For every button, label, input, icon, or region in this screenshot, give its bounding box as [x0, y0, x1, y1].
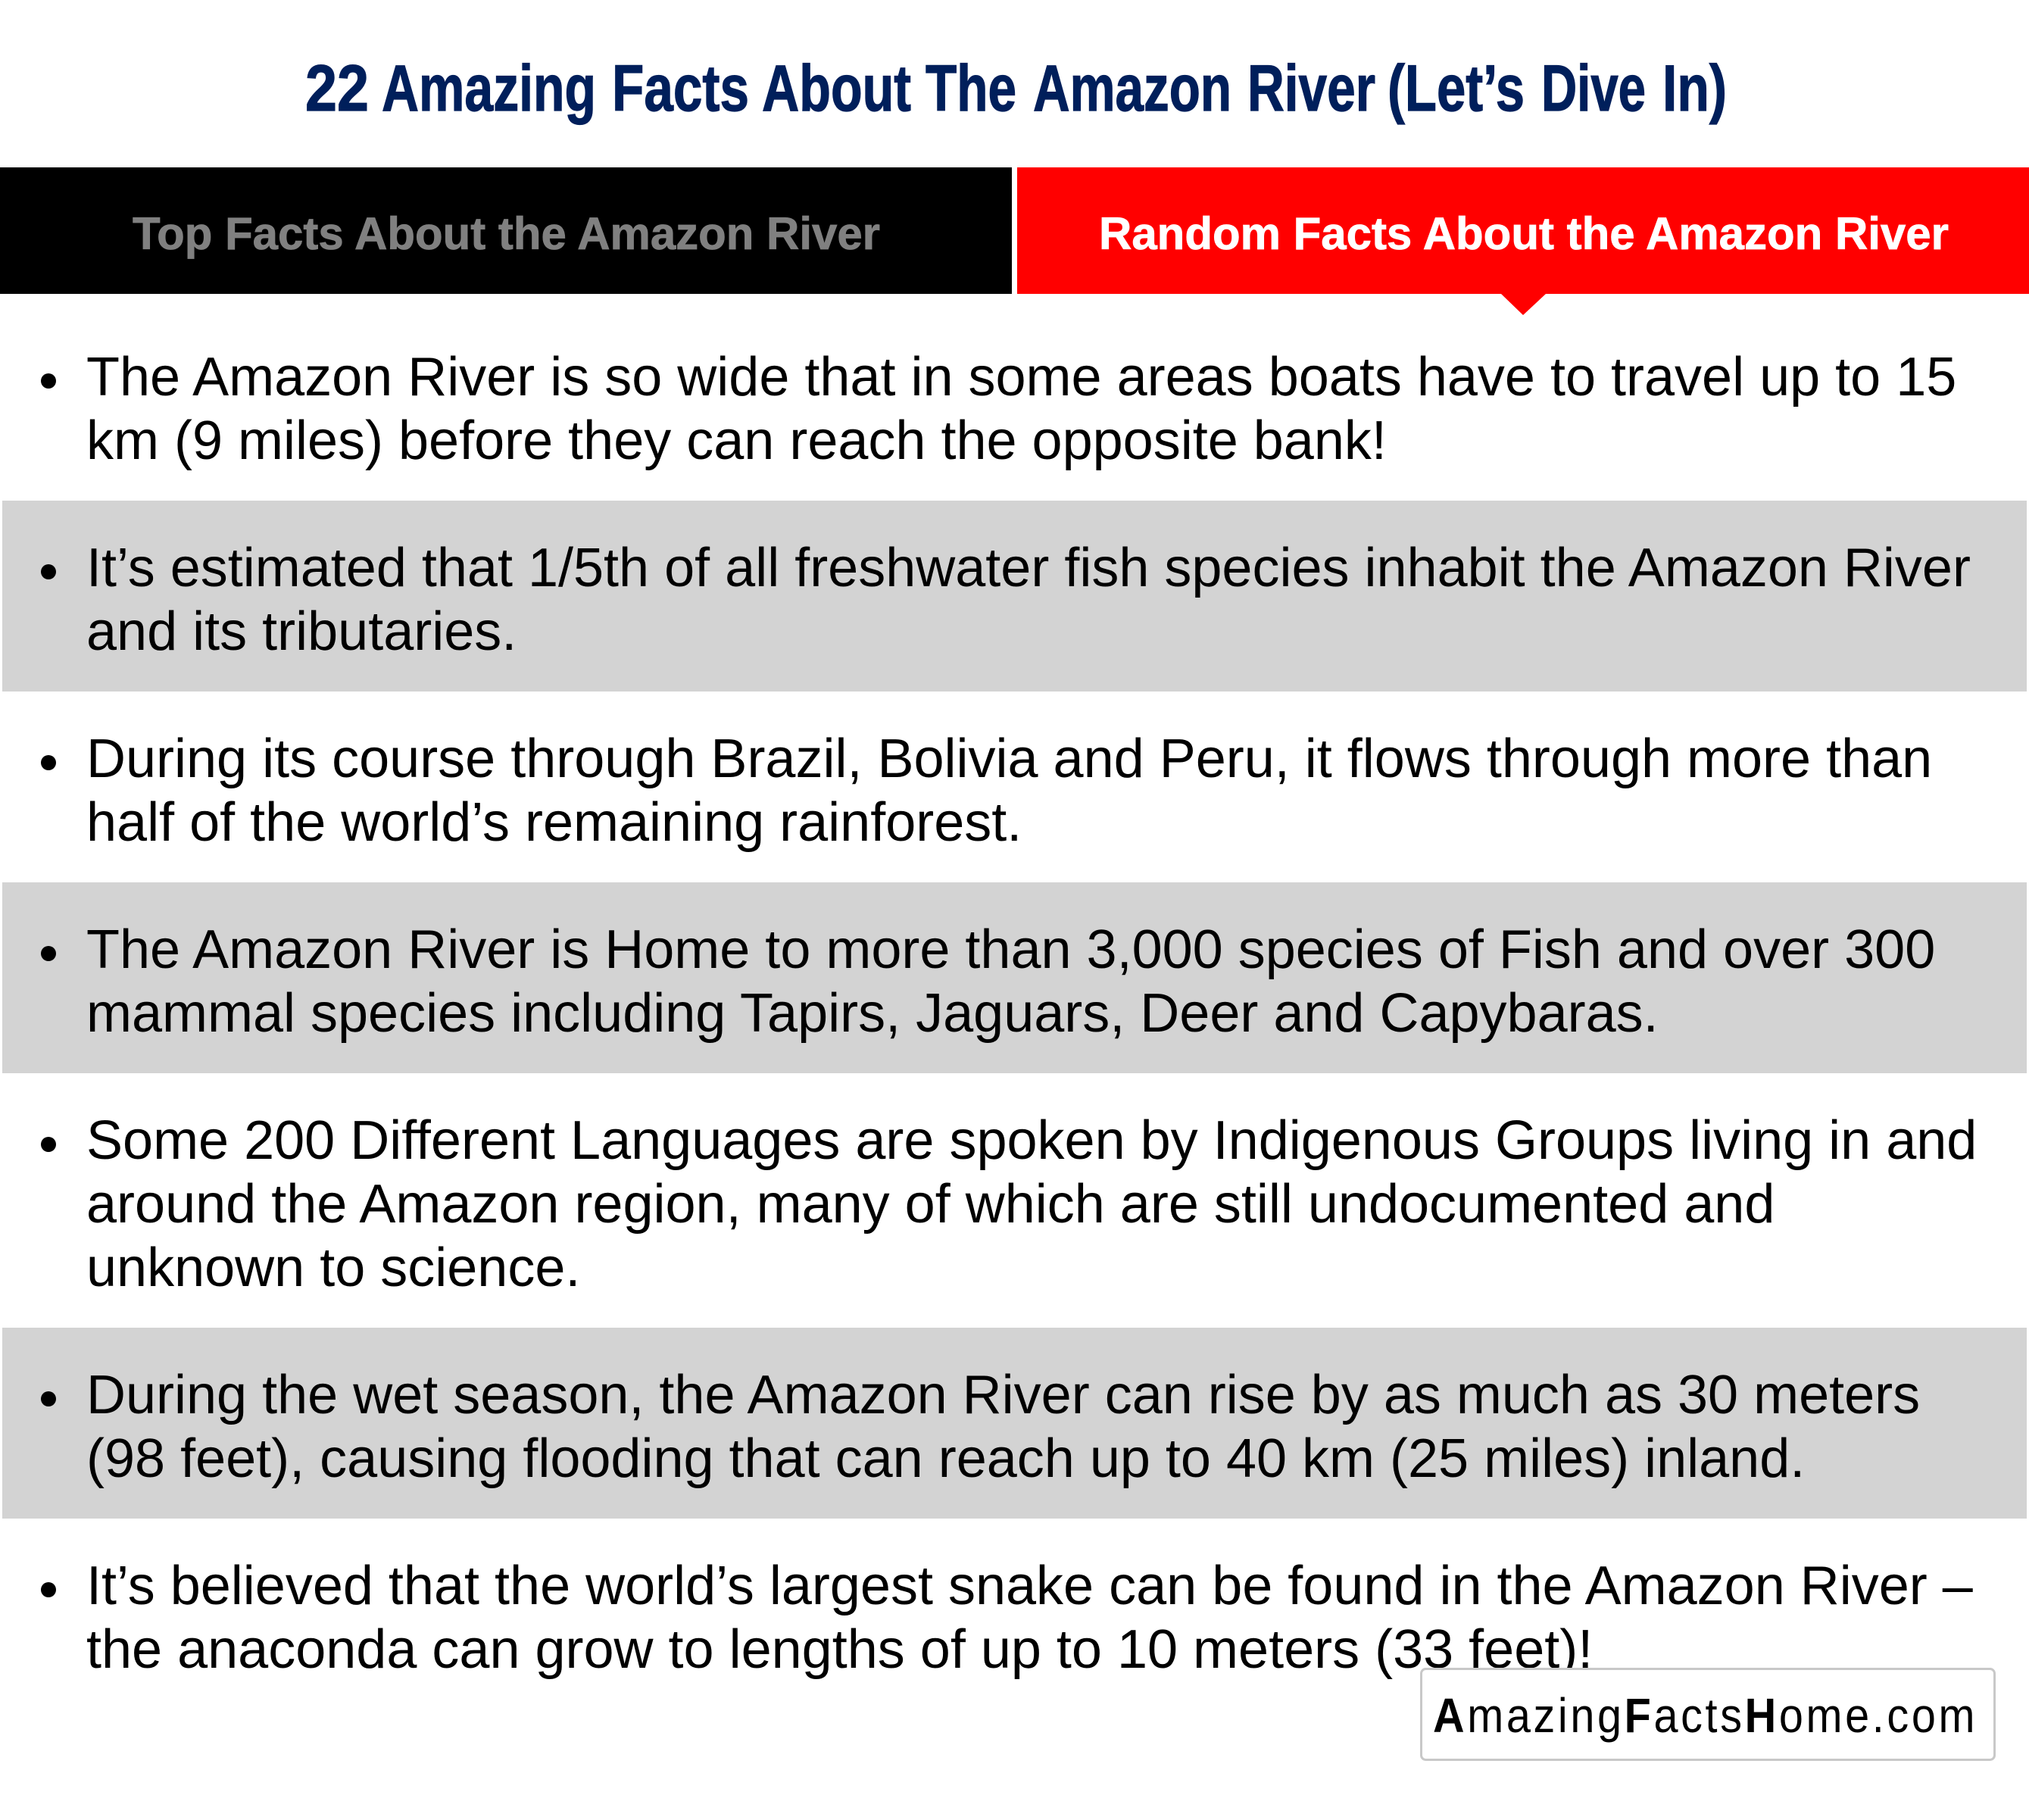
- fact 6: [2, 1328, 2027, 1519]
- fact 2: and its tributaries.: [86, 601, 517, 662]
- fact 1: [41, 347, 1956, 471]
- fact 4: mammal species including Tapirs, Jaguars, Deer and Capybaras.: [86, 983, 1659, 1044]
- title: [305, 52, 1727, 125]
- title: Facts: [612, 52, 749, 125]
- watermark: AmazingFactsHome.com: [1433, 1688, 1975, 1743]
- fact 7: [41, 1556, 1974, 1680]
- title: Amazon: [1033, 52, 1231, 125]
- fact 3: During its course through Brazil, Bolivia and Peru, it flows through more than: [86, 729, 1932, 789]
- fact 7: It’s believed that the world’s largest snake can be found in the Amazon River –: [86, 1556, 1974, 1616]
- fact 2: It’s estimated that 1/5th of all freshwater fish species inhabit the Amazon River: [86, 538, 1971, 598]
- fact 6: (98 feet), causing flooding that can reach up to 40 km (25 miles) inland.: [86, 1428, 1805, 1489]
- title: Dive: [1541, 52, 1646, 125]
- fact 5: around the Amazon region, many of which are still undocumented and: [86, 1174, 1775, 1235]
- title: The: [926, 52, 1016, 125]
- tab: top facts: [0, 167, 1012, 294]
- fact 5: [41, 1110, 1977, 1298]
- fact 1: The Amazon River is so wide that in some areas boats have to travel up to 15: [86, 347, 1956, 407]
- fact 6: During the wet season, the Amazon River can rise by as much as 30 meters: [86, 1365, 1920, 1425]
- tab: random facts (active): Random Facts About the Amazon River: [1099, 208, 1949, 259]
- title: About: [762, 52, 911, 125]
- title: 22: [305, 52, 369, 125]
- title: In): [1662, 52, 1727, 125]
- tab: random facts (active): [1017, 167, 2029, 315]
- fact 4: [2, 882, 2027, 1073]
- fact 1: km (9 miles) before they can reach the opposite bank!: [86, 411, 1387, 471]
- title: Amazing: [382, 52, 596, 125]
- tab: top facts: Top Facts About the Amazon River: [133, 208, 880, 259]
- fact 5: unknown to science.: [86, 1238, 580, 1298]
- fact 7: the anaconda can grow to lengths of up to 10 meters (33 feet)!: [86, 1619, 1593, 1680]
- title: River: [1247, 52, 1375, 125]
- watermark: [1421, 1669, 1995, 1760]
- fact 3: [41, 729, 1932, 853]
- title: (Let’s: [1388, 52, 1525, 125]
- fact 4: The Amazon River is Home to more than 3,000 species of Fish and over 300: [86, 919, 1935, 980]
- fact 2: [2, 501, 2027, 691]
- fact 5: Some 200 Different Languages are spoken by Indigenous Groups living in and: [86, 1110, 1977, 1171]
- fact 3: half of the world’s remaining rainforest.: [86, 792, 1022, 853]
